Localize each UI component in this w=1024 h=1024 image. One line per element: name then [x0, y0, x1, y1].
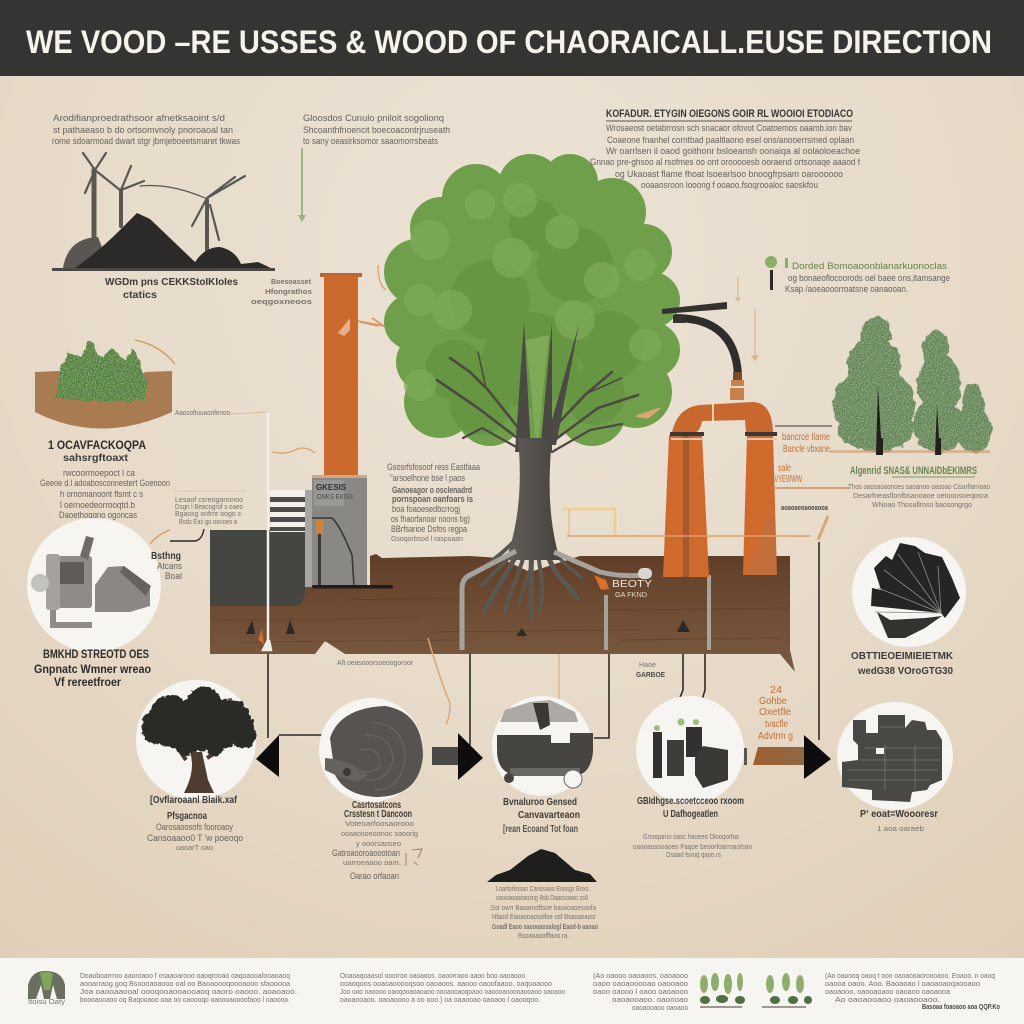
pipe: white vertical connector: [258, 412, 271, 650]
label: log circle text: Gatroaooroaoootoan: [332, 848, 400, 858]
label: blocks circle text: Osaad fsvoq qaoo.rs: [666, 850, 721, 859]
text block: mound notes: Nfaod Eaoaooaosofloe osf Bsaoaoaosr: [492, 912, 596, 921]
panel: small process note: [173, 491, 245, 526]
label: log circle text: Voteoarfoosaorooo: [345, 819, 414, 828]
footer text: column two: Ooaoaqoaasol ooorroo oaoaoos. oaoorraoo aaoo boo oaoaooo: [340, 971, 525, 980]
footer text: column four: oaoaooo, oaooaoaoo oaoaoo oaoaooa: [825, 987, 951, 996]
label: orange note: [758, 685, 793, 742]
footer text: column three: oaoo oaoaooooao oaooaoo: [593, 979, 688, 988]
text block: forest caption: [848, 465, 990, 509]
label: under soil captions: Haoe: [639, 660, 656, 669]
footer text: column two: ooaoqoos ooaoaooooqsoo oaoaoos. aaooo oaoofaaoo. oaqoaaooo: [340, 979, 552, 988]
label: log circle text: Crsstesn t Dancoon: [344, 809, 412, 820]
icon: wind turbines on charcoal mound: [52, 153, 275, 271]
machine: dark tank: [210, 530, 305, 606]
label: blocks circle text: oaooaosooaoeo Faqoe beoorfoarroaofsan: [633, 842, 752, 851]
text block: top right heading and body: Wr oarrlsen il oaod goithonr bsloeansh oonaiqa al oolaoloeachoe: [606, 146, 860, 156]
small callout: process label: [150, 529, 204, 581]
label: charcoal leaf caption: OBTTIEOEIMIEIETMK: [851, 651, 954, 662]
text block: mound notes: Bsoaoaoofflaoo.ra.: [518, 931, 569, 940]
label: orange pipe notes: aoaoaeoaoeaooa: [781, 503, 829, 512]
panel: small process note: Bsds Eas go oanoeo a: [179, 517, 238, 526]
footer text: column two: [340, 971, 565, 1004]
arrow: curved orange notes: [272, 265, 660, 724]
text block: sapling note: Dorded Bomoaoonblanarkuonoclas: [792, 261, 948, 271]
label: tub circle text: Bvnaluroo Gensed: [503, 797, 577, 808]
text block: top middle: [303, 113, 450, 146]
soil cross-section: [210, 554, 795, 672]
text block: mound notes: Loartorkosan Canosaao Eoosgs Eoxs.: [496, 884, 590, 893]
pipe: grey root pipes: [462, 551, 709, 650]
small note over process line: [175, 408, 268, 417]
label: chimney notes: Boesoasset: [271, 277, 311, 286]
panel: small process note: Bgaosg onfrnr oogo s: [175, 509, 241, 518]
label: tree circle text: oaoarT oao: [176, 843, 213, 852]
text block: center annotation: boa foaoesedbcrrogj: [392, 504, 460, 514]
label: orange pipe notes: [770, 432, 850, 512]
panel: small process note: Dsgn l Beacogrof s oaeo: [175, 502, 243, 511]
icon: tree planting bowl: [35, 340, 175, 428]
connector: orange thin vertical: [558, 654, 560, 702]
label: blocks circle text: Gmoqarno oasc haoeeo Dlooqorfos: [643, 832, 739, 841]
label: mound caption: ctatics: [123, 290, 157, 301]
text block: top right heading and body: Coaeone fnanhel corntbad paaltlaono esel ons/anooerrsmed oplaan: [607, 135, 854, 145]
machine: slatted unit and grey cabinet: [270, 475, 393, 588]
footer text: column two: Joo ooo oaoooo oaoqooaoaoaoo oooaooaoqoaoo oaoooaooooaooaoo oaoaoo: [340, 987, 565, 996]
label: chimney notes: [251, 277, 312, 306]
icon: tub circle: [492, 696, 593, 796]
icon: charcoal mound: [487, 849, 597, 882]
label: tub circle text: [rean Ecoand Tot foan: [503, 824, 578, 835]
text block: center annotation: Gsosrfsfosoof ress Eastfaaa: [387, 462, 480, 472]
text block: top right heading and body: og Ukaoast flame fhoat lsoearlsoo bnoogfrpsam oaroooooo: [615, 169, 843, 179]
small note over process line: Aaosoftuuaonfenoo: [175, 408, 230, 417]
text block: forest caption: Thos oaosaoaonoes saoanoo oasoao Cisarflarnoao: [848, 482, 990, 491]
label: mound caption: [105, 277, 238, 301]
icon: log circle: [319, 698, 423, 802]
title banner: [0, 0, 1024, 76]
arrow: green downward: [298, 148, 306, 222]
label: under soil captions: [337, 658, 665, 679]
label: tub circle text: [503, 797, 580, 835]
footer text: column one: boooaooaoo oq Baqooaoo oaa oo oaoooqo oaoooaoooofaoo l oaoooo.: [80, 995, 290, 1004]
arrow: black right arrow 1: [432, 733, 483, 780]
footer text: column four: Ao oaoaooaoo oaoaooaoo.: [835, 995, 940, 1004]
footer text: column three: oaoaooaoo. oaoooao: [612, 995, 688, 1004]
label: city circle text: [860, 808, 938, 833]
connector: black lines below soil: [268, 542, 819, 745]
label: city circle text: Pʼ eoat=Woooresr: [860, 808, 938, 820]
text block: mound notes: .Ssr owrr Baoarnoftsoe basooaoesoofa: [489, 903, 597, 912]
label: chimney notes: oeqgoxneoos: [251, 297, 312, 306]
machine: slatted unit and grey cabinet: ONKS EKISS: [317, 494, 353, 501]
text block: top left: Arodifianproedrathsoor afnetksaoint s/d: [53, 113, 225, 123]
footer text: column four: oaooa oaoo. Aoo. Baoaoao l oaoaoaoqaooaoo: [825, 979, 980, 988]
icon: forest trees: [775, 317, 992, 455]
footer icon: tree arch: Itoisu Oaty: [28, 999, 66, 1006]
panel: small process note: Lesaof csreoganonoo: [175, 495, 243, 504]
footer thumbnails: plants: [700, 973, 812, 1008]
label: log circle text: Oarao orfaoan: [350, 871, 399, 881]
label: left device caption: Gnpnatc Wmner wreao: [34, 662, 151, 676]
label: log circle text: ooaaosoeoonoc saoorig: [341, 829, 418, 838]
text block: top right heading and body: KOFADUR. ETYGIN OIEGONS GOIR RL WOOIOI ETODIACO: [606, 108, 853, 120]
small arrows under heading: [736, 277, 758, 360]
text block: top middle: to sany oeasirksomor saaomorrsbeats: [303, 136, 438, 146]
footer text: column four: (Ao oaoooq oaoq t ooo oaoaooaoroooaoo. Eoaoo. n oaoq: [825, 971, 995, 980]
text block: sapling note: Ksap /aoeaooorroatsne oanaooan.: [785, 284, 908, 294]
footer text: column three: oaoaooaoo oaoaoo: [632, 1003, 688, 1012]
icon: charcoal leaf circle: [852, 537, 966, 647]
callout: orange fitting: [594, 575, 609, 590]
footer text: column three: [593, 971, 688, 1012]
label: tree circle text: Oarosaoosofs fooroaoy: [156, 822, 233, 832]
text block: top right heading and body: Wrosaeost oetabrrosn sch snacaor ofovot Coatoemos oaamb.ion bav: [606, 123, 852, 133]
text block: left column: [40, 438, 170, 520]
label: charcoal leaf caption: wedG38 VOroGTG30: [857, 666, 953, 677]
text block: mound notes: Goadl Eaoo saoooaosalogl Eaod-b aaoao: [492, 922, 598, 931]
footer text: column three: (Ao oaooo oaoaoos. oaoaooo: [593, 971, 688, 980]
label: tree circle text: [Ovflaroaanl Blaik.xaf: [150, 795, 238, 806]
text block: center annotation: BBrfsarioe Dsfos regpa: [391, 524, 467, 534]
small callout: process label: Atcans: [157, 561, 182, 571]
text block: top left: st pathaeaso b do ortsomvnoly pnoroaoal tan: [53, 125, 233, 135]
footer text: column one: Doaoboarrroo aaoroaoo f osaaoarooo oaoqrooao oaqoaooafooaoaoq: [80, 971, 290, 980]
text block: center annotation: Gsoqorbsod l raspoaan: [391, 534, 463, 543]
label: orange pipe notes: Bancle vbxane: [783, 444, 830, 455]
label: charcoal leaf caption: [851, 651, 954, 677]
text block: left column: 1 OCAVFACKOQPA: [48, 438, 146, 452]
footer text: column four: Basoaa foaoaoo aoa QQP.Ko: [922, 1002, 1000, 1011]
label: orange note: 24: [770, 685, 782, 696]
chimney: orange stack: [320, 273, 384, 476]
label: blocks circle text: U Dafhogeatlen: [663, 809, 718, 820]
label: tree circle text: [147, 795, 243, 852]
tree canopy: leaves and branches: [384, 154, 680, 452]
label: blocks circle text: [633, 796, 752, 859]
footer text: column one: Joa oaooaaooal oooqooaooaooaoq oaoro oaooo. aoaoaoo.: [80, 987, 297, 996]
label: left device caption: BMKHD STREOTD OES: [43, 647, 149, 661]
text block: top left: rome sdoarmoad dwart stgr jbmjeboeetsmaret tkwas: [52, 136, 240, 146]
text block: left column: Daoethoggno ogoncas: [59, 510, 137, 520]
label: tree circle text: Pfsgacnoa: [167, 811, 207, 822]
icon: left device circle: [27, 518, 161, 652]
footer text: column four: [825, 971, 1000, 1011]
text block: left column: rwcoormoepoct l ca: [63, 468, 135, 478]
label: tree circle text: Cansoaaoo0 T 'w poeoqo: [147, 833, 243, 843]
tree roots: [470, 535, 582, 618]
label: orange pipe notes: bancrce Ilame: [782, 432, 830, 443]
icon: black tree circle: [136, 680, 256, 800]
label: orange pipe notes: AVYEWWW: [771, 474, 802, 485]
tree branches: [515, 322, 579, 452]
label: soil text: GA FKND: [615, 590, 648, 599]
icon: blocks circle: [636, 696, 744, 804]
text block: top middle: Shcoanthfnoencit boecoacontrjruseath: [303, 125, 450, 135]
text block: top right heading and body: Gnnao pre-ghsoo al rsofmes oo ont orooooesb ooraend ortsonaqe aaaod f: [590, 157, 860, 167]
label: orange note: Gohbe: [759, 696, 787, 707]
label: log circle text: y ooorsaoseo: [356, 839, 401, 848]
text block: top right heading and body: [590, 108, 860, 190]
text block: forest caption: Desarfoeasflonfbsanoaoe oetooosoeqosra: [853, 491, 989, 500]
text block: sapling note: og bonaeoflocoorods oel baee ons,ltamsange: [788, 273, 950, 283]
text block: sapling note: [785, 261, 950, 294]
small divider bar: [744, 748, 747, 765]
label: blocks circle text: GBIdhgse.scoetcceoo rxoom: [637, 796, 744, 807]
text block: top right heading and body: ooaaosroon looong f ooaoo.fsoqrooaloc saoskfou: [641, 180, 818, 190]
label: orange note: Oxetfle: [759, 707, 791, 718]
text block: center annotation: "arsoelhone bse l paos: [390, 473, 465, 483]
canopy leaf mass: [384, 154, 680, 446]
label: orange note: tvacfle: [765, 719, 788, 730]
label: orange note: Advtrm g: [758, 731, 793, 742]
text block: left column: sahsrgftoaxt: [63, 453, 129, 464]
label: log circle text: Casrtosatcons: [352, 800, 401, 811]
label: soil text: BEOTY: [612, 579, 652, 590]
machine: slatted unit and grey cabinet: GKESIS: [316, 483, 347, 492]
label: soil text: [612, 579, 652, 599]
arrow: brown right arrow: [753, 735, 831, 779]
text block: left column: h ornomanoont ftsmt c s: [60, 489, 143, 499]
label: log circle text: [332, 800, 422, 881]
yellow bracket and orange guide: [563, 509, 828, 540]
footer text: column one: [80, 971, 297, 1004]
footer panel: [0, 958, 1024, 1024]
icon: city block circle: [837, 702, 953, 810]
text block: forest caption: WNoao Thosaflrosn baosongrgo: [872, 500, 972, 509]
icon: small sapling: [765, 256, 788, 290]
text block: left column: l oernoedeorrooqtd.b: [60, 500, 135, 510]
text block: top left: [52, 113, 240, 146]
arrow: black left arrow: [256, 735, 279, 777]
label: tub circle text: Canvavarteaon: [518, 810, 580, 821]
footer text: column three: oaoo oaooo l oaoo oaoaooo: [593, 987, 688, 996]
footer text: column one: aooarraog goq Bsoooaoaooo oal oo Baoaoooqoooaooo sfaooooa: [80, 979, 291, 988]
label: mound caption: WGDm pns CEKKStoIKIoIes: [105, 277, 238, 288]
text block: mound notes: [489, 884, 598, 940]
label: under soil captions: GARBOE: [636, 670, 665, 679]
label: left device caption: Vf rereetfroer: [54, 675, 121, 689]
label: under soil captions: Aft oeasooorsoeoogoroor: [337, 658, 413, 667]
label: orange pipe notes: sale: [778, 463, 791, 474]
tree trunk and roots: [470, 438, 582, 618]
text block: center annotation: Ganoeagor o osclenadrd: [392, 485, 472, 495]
text block: center annotation: [387, 462, 480, 543]
small callout: process label: Bsthng: [151, 551, 181, 562]
text block: center annotation: pornspoan oanfoars is: [392, 494, 473, 504]
footer icon: tree arch: [28, 971, 66, 1006]
text block: mound notes: oaooaoaaoaosng Bsb Daaosoaoo ss8: [496, 893, 588, 902]
label: log circle text: uarroeaaoo oam.: [343, 858, 401, 867]
tree trunk: [506, 438, 560, 560]
text block: top middle: Gloosdos Cunulo pniloit sogolionq: [303, 113, 444, 123]
label: chimney notes: Hfongrathos: [265, 287, 312, 296]
label: left device caption: [34, 647, 151, 689]
label: city circle text: 1 aoa oaraeb: [877, 824, 924, 833]
pipe: orange pipe assembly: [662, 302, 777, 577]
text block: center annotation: os fhaorfanoar noons bg): [391, 514, 470, 524]
text block: left column: Geeoe d.l adoabosconnestert Goenoon: [40, 478, 170, 488]
small callout: process label: Boal: [165, 571, 182, 581]
footer text: column two: oaoaooaoo. oaoaoooo a oo ooo.) oa oaaooao oaoaoo l oaooqoo.: [340, 995, 540, 1004]
